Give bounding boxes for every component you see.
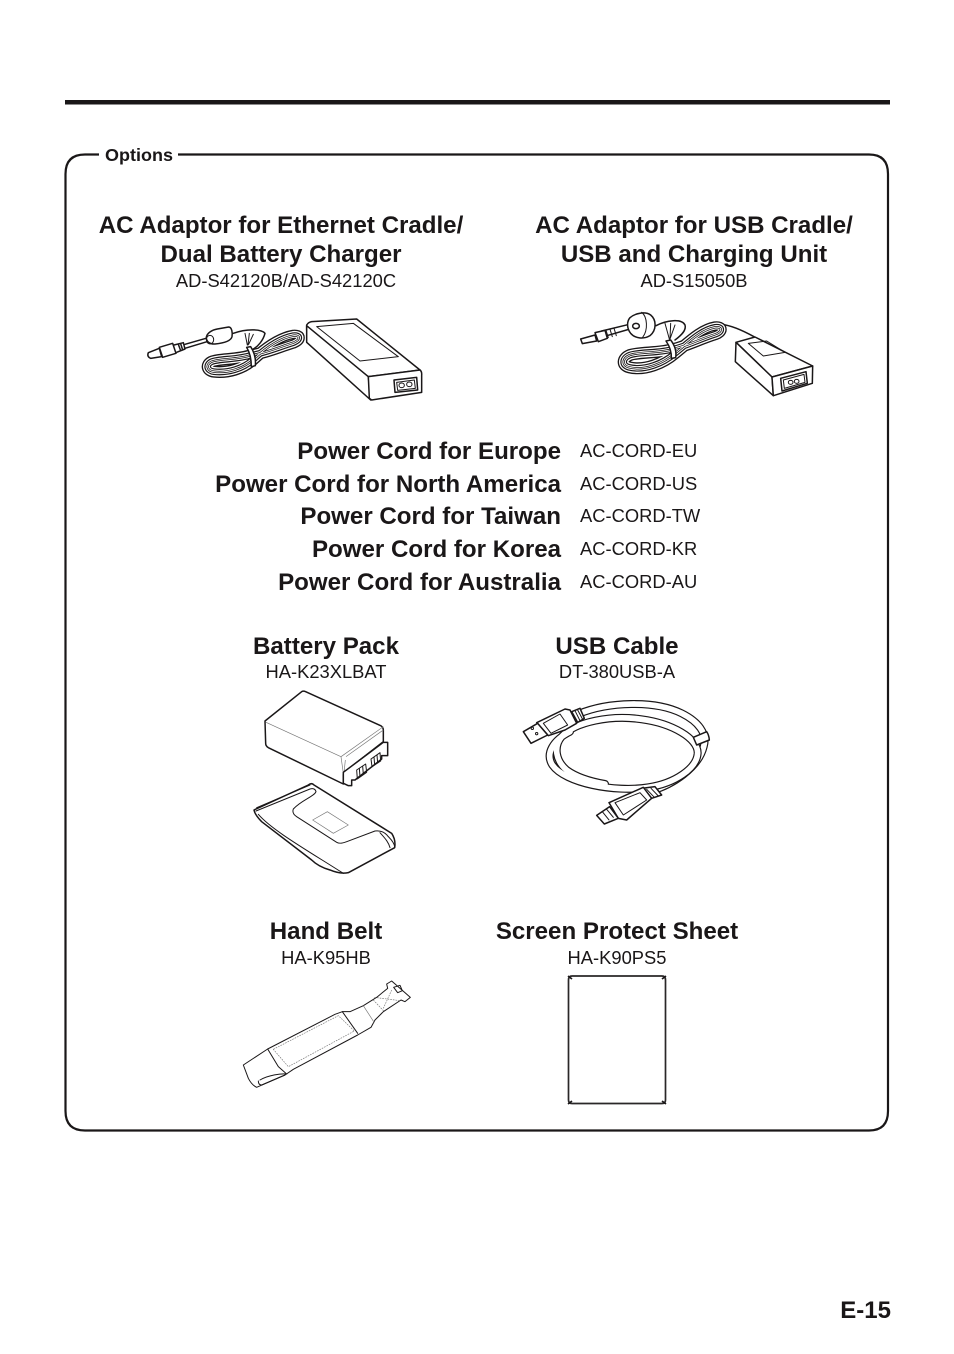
heading: battery pack: HA-K23XLBAT (266, 661, 386, 682)
heading: USB cable (555, 633, 679, 682)
heading: AC adaptor for USB cradle: AC Adaptor for USB Cradle/ (535, 212, 853, 239)
heading: battery pack: Battery Pack (253, 633, 400, 660)
list: power cords (215, 438, 701, 596)
list: power cords: Power Cord for Europe (297, 438, 561, 465)
icon: USB cable (523, 704, 709, 824)
heading: screen protect sheet: Screen Protect Sheet (496, 918, 738, 945)
list: power cords: Power Cord for Australia (278, 569, 562, 596)
heading: AC adaptor for Ethernet cradle (99, 212, 464, 291)
heading: AC adaptor for Ethernet cradle: AC Adaptor for Ethernet Cradle/ (99, 212, 464, 239)
heading: battery pack (253, 633, 400, 682)
page number: E-15 (840, 1297, 891, 1324)
list: power cords: Power Cord for Korea (312, 536, 562, 563)
heading: AC adaptor for USB cradle: USB and Charging Unit (561, 241, 827, 268)
heading: USB cable: DT-380USB-A (559, 661, 676, 682)
heading: hand belt: Hand Belt (270, 918, 382, 945)
panel: options (66, 145, 888, 1130)
panel label: Options (105, 145, 173, 165)
top rule (65, 100, 890, 104)
list: power cords: AC-CORD-TW (580, 505, 701, 526)
icon: hand belt (243, 981, 410, 1087)
list: power cords: AC-CORD-EU (580, 440, 697, 461)
heading: AC adaptor for Ethernet cradle: AD-S42120B/AD-S42120C (176, 270, 396, 291)
icon: screen protect sheet (568, 976, 666, 1104)
heading: hand belt: HA-K95HB (281, 947, 371, 968)
heading: screen protect sheet: HA-K90PS5 (568, 947, 666, 968)
list: power cords: Power Cord for North America (215, 471, 562, 498)
heading: AC adaptor for Ethernet cradle: Dual Battery Charger (160, 241, 402, 268)
list: power cords: AC-CORD-AU (580, 571, 697, 592)
heading: screen protect sheet (496, 918, 738, 968)
heading: hand belt (270, 918, 382, 968)
list: power cords: AC-CORD-KR (580, 538, 697, 559)
icon: AC adaptor large (148, 319, 422, 400)
heading: AC adaptor for USB cradle (535, 212, 853, 291)
heading: USB cable: USB Cable (555, 633, 679, 660)
heading: AC adaptor for USB cradle: AD-S15050B (640, 270, 748, 291)
list: power cords: Power Cord for Taiwan (300, 503, 561, 530)
icon: battery and case (254, 691, 395, 873)
list: power cords: AC-CORD-US (580, 473, 697, 494)
icon: AC adaptor small (581, 312, 813, 396)
